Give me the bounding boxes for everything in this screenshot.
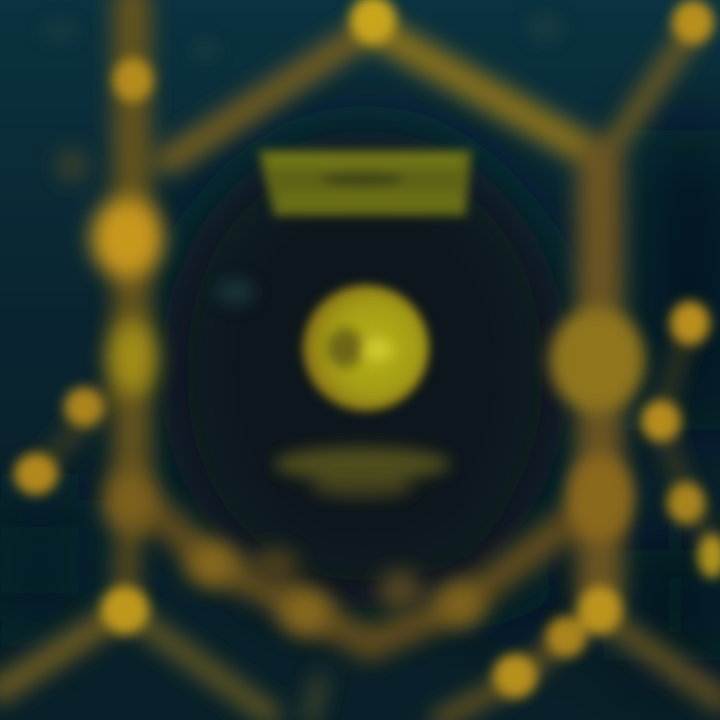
left vertical line <box>113 0 151 520</box>
left column nodes <box>56 147 163 530</box>
top nodes <box>113 0 714 102</box>
dark shading <box>0 130 720 660</box>
hexagon roof <box>170 28 372 160</box>
central disc icon <box>303 285 429 411</box>
lower left branches <box>0 610 125 690</box>
right side nodes <box>493 301 720 698</box>
heading block: blurred title <box>258 150 472 216</box>
left branch <box>35 370 130 475</box>
lower right branches <box>440 610 600 720</box>
faint background marks <box>42 12 563 306</box>
left branch nodes <box>14 387 149 634</box>
bottom arc nodes <box>186 542 484 636</box>
right vertical line <box>577 160 623 590</box>
right column nodes <box>549 308 645 542</box>
caption block: blurred text under disc <box>274 447 450 498</box>
hexagon bottom <box>130 490 600 645</box>
upper right connector <box>610 30 692 150</box>
